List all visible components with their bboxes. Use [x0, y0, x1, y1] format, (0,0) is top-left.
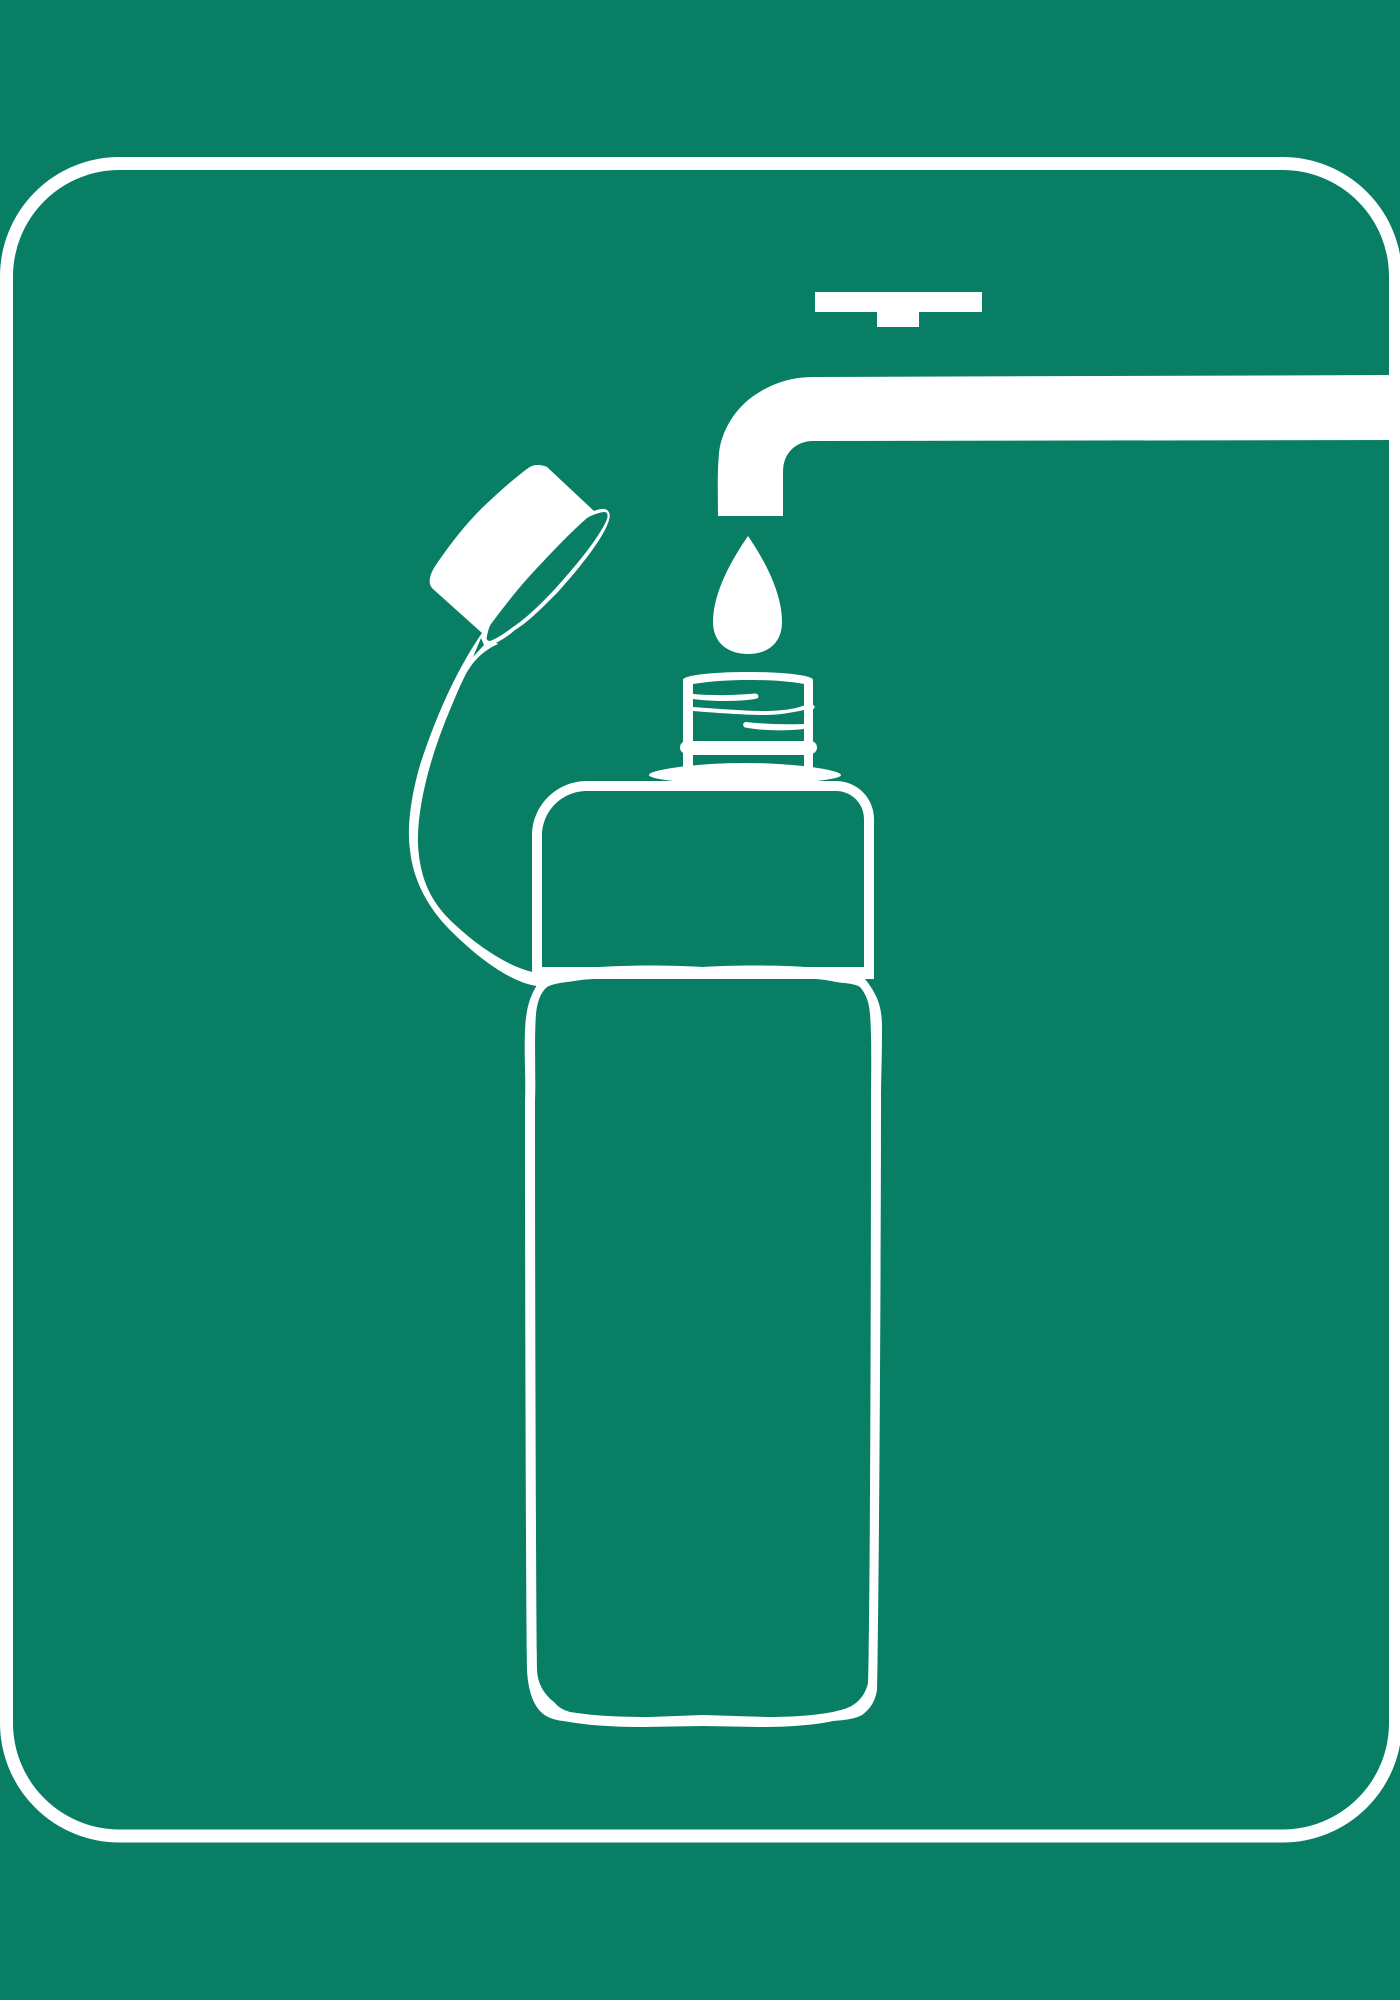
bottle band: [540, 966, 874, 979]
neck collar: [683, 672, 813, 768]
bottle body: [525, 975, 882, 1727]
thread middle: [693, 704, 815, 715]
cap opening: [487, 512, 608, 641]
tap spout: [718, 375, 1400, 516]
thread upper left: [693, 694, 758, 701]
icon: tap: [718, 292, 1400, 516]
icon: bottle cap with strap: [409, 465, 610, 986]
neck flange: [649, 763, 841, 783]
cap body: [430, 465, 610, 645]
strap gap: [473, 638, 484, 657]
bottle shoulder: [532, 781, 874, 979]
tap handle: [815, 292, 982, 327]
cap strap: [409, 633, 537, 986]
bottle neck: [649, 672, 841, 783]
thread lower right: [743, 722, 804, 730]
icon: water drop: [713, 536, 782, 654]
neck band: [680, 741, 817, 754]
